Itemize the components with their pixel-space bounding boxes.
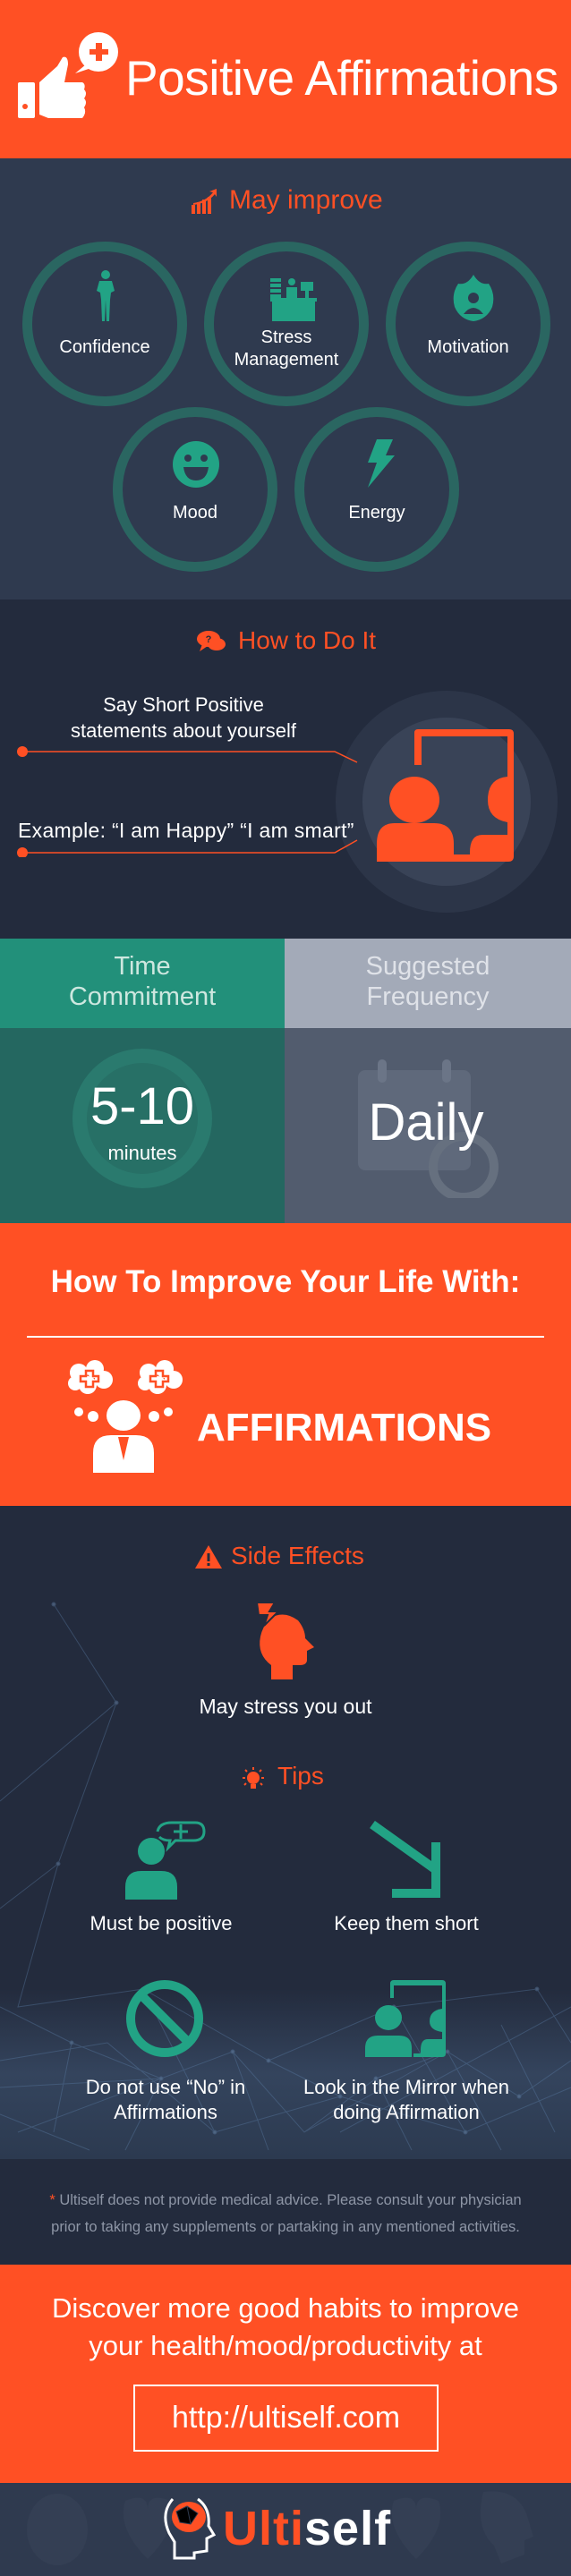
icon: calendar (358, 1059, 499, 1198)
header: Time (114, 952, 171, 981)
tip: do not use no (86, 1980, 245, 2123)
title: Positive Affirmations (125, 50, 558, 106)
label: Stress (261, 327, 311, 347)
text: example: Example: “I am Happy” “I am smart” (18, 819, 354, 842)
text: may stress: May stress you out (199, 1695, 372, 1718)
text: discover (52, 2292, 519, 2361)
panel: how to improve banner (0, 1223, 571, 1506)
heading: side effects: Side Effects (231, 1542, 364, 1569)
label: Energy (348, 503, 405, 523)
icon: lightning (368, 439, 395, 488)
disclaimer (49, 2192, 522, 2235)
item: confidence (22, 242, 187, 406)
text: say short statements: statements about yourself (71, 719, 296, 742)
heading: may improve: May improve (229, 185, 383, 215)
heading: tips (243, 1762, 324, 1790)
heading: How To Improve Your Life With: (51, 1264, 520, 1299)
label: Mood (173, 503, 217, 523)
text: discover: your health/mood/productivity at (89, 2330, 482, 2361)
tip: must be positive: Must be positive (90, 1912, 232, 1934)
panel: time commitment (0, 939, 285, 1223)
network background (0, 1602, 571, 2151)
icon: stressed head (258, 1603, 314, 1679)
callout line 1 (17, 746, 358, 763)
label: affirmations: AFFIRMATIONS (197, 1406, 491, 1450)
button: url (133, 2385, 439, 2452)
value: Daily (369, 1093, 483, 1152)
item: stress management (204, 242, 369, 406)
label: Management (234, 350, 338, 370)
wordmark: Ultiself (223, 2502, 391, 2555)
logo (164, 2498, 391, 2559)
item: motivation (386, 242, 550, 406)
icon: smiley (173, 441, 219, 488)
heading: how to do it: ? (206, 634, 212, 645)
icon: mirror people (377, 729, 514, 862)
heading: tips: Tips (277, 1762, 324, 1790)
item: energy (294, 407, 459, 572)
callout line 2 (17, 839, 358, 857)
header: Commitment (69, 982, 216, 1011)
heading: how to do it: How to Do It (238, 626, 376, 654)
header banner (0, 0, 571, 158)
button: url: http://ultiself.com (172, 2401, 400, 2435)
faint background icons (0, 2483, 571, 2576)
text: say short statements (71, 693, 297, 742)
clock background (72, 1049, 212, 1188)
header (0, 939, 285, 1028)
text: discover: Discover more good habits to improve (52, 2292, 519, 2324)
disclaimer: * Ultiself does not provide medical advice. Please consult your physician (49, 2192, 522, 2208)
value: 5-10 (90, 1077, 194, 1135)
panel: may improve (0, 158, 571, 599)
icon: desk (270, 278, 317, 321)
tip: do not use no: Do not use “No” in (86, 2076, 245, 2098)
panel: side effects and tips (0, 1506, 571, 2265)
header (285, 939, 571, 1028)
icon: flame person (453, 275, 494, 321)
tip: do not use no: Affirmations (114, 2101, 217, 2123)
tip: keep them short: Keep them short (334, 1912, 479, 1934)
label: Confidence (59, 337, 150, 357)
big circle with mirror icon (336, 691, 558, 913)
label: Motivation (427, 337, 509, 357)
header: Suggested (366, 952, 490, 981)
icon: standing person (97, 270, 115, 321)
icon: thumbs up with speech bubble (18, 32, 118, 118)
footer (0, 2483, 571, 2576)
item: mood (113, 407, 277, 572)
icon: person with thought clouds (68, 1360, 183, 1473)
header: Frequency (366, 982, 489, 1011)
panel: call to action (0, 2265, 571, 2483)
tip: mirror: doing Affirmation (333, 2101, 480, 2123)
tip: mirror: Look in the Mirror when (303, 2076, 509, 2098)
disclaimer: prior to taking any supplements or partaking in any mentioned activities. (51, 2219, 520, 2235)
panel: how to do it (0, 599, 571, 939)
panel: suggested frequency (285, 939, 571, 1223)
text: say short statements: Say Short Positive (103, 693, 264, 716)
tip: keep them short (334, 1821, 479, 1934)
icon: brain head (164, 2498, 216, 2559)
tip: mirror (303, 1980, 509, 2123)
label (234, 327, 338, 370)
tip: must be positive (90, 1822, 232, 1934)
panel: time commitment: minutes (107, 1142, 177, 1164)
